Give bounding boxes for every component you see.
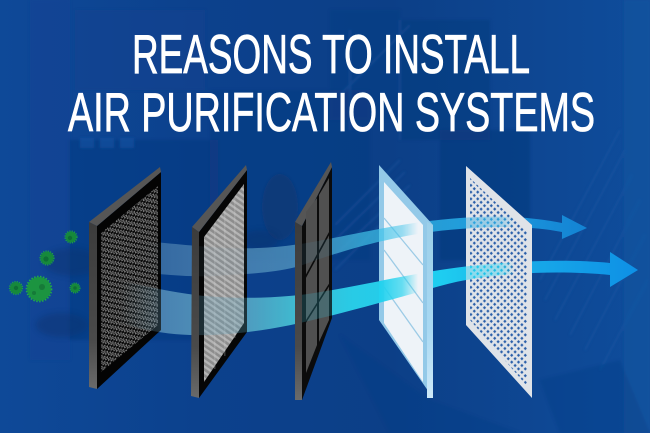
filter 3: dark panelled carbon filter xyxy=(295,162,332,400)
virus particle left xyxy=(10,282,22,294)
virus particle right xyxy=(70,283,80,293)
green virus particles xyxy=(10,231,80,302)
air flow band and arrow: lower xyxy=(120,252,638,335)
filter 2: pleated grey mesh xyxy=(191,165,247,398)
title xyxy=(68,23,595,143)
air flow band and arrow: upper xyxy=(140,215,587,276)
virus particle medium xyxy=(40,251,54,265)
filter 5: perforated metal grille xyxy=(466,166,532,398)
filter 4: white HEPA filter with blue frame xyxy=(379,165,433,398)
virus particle small top xyxy=(65,231,77,243)
filter 1: black mesh xyxy=(89,167,161,389)
virus particle large xyxy=(26,276,52,302)
